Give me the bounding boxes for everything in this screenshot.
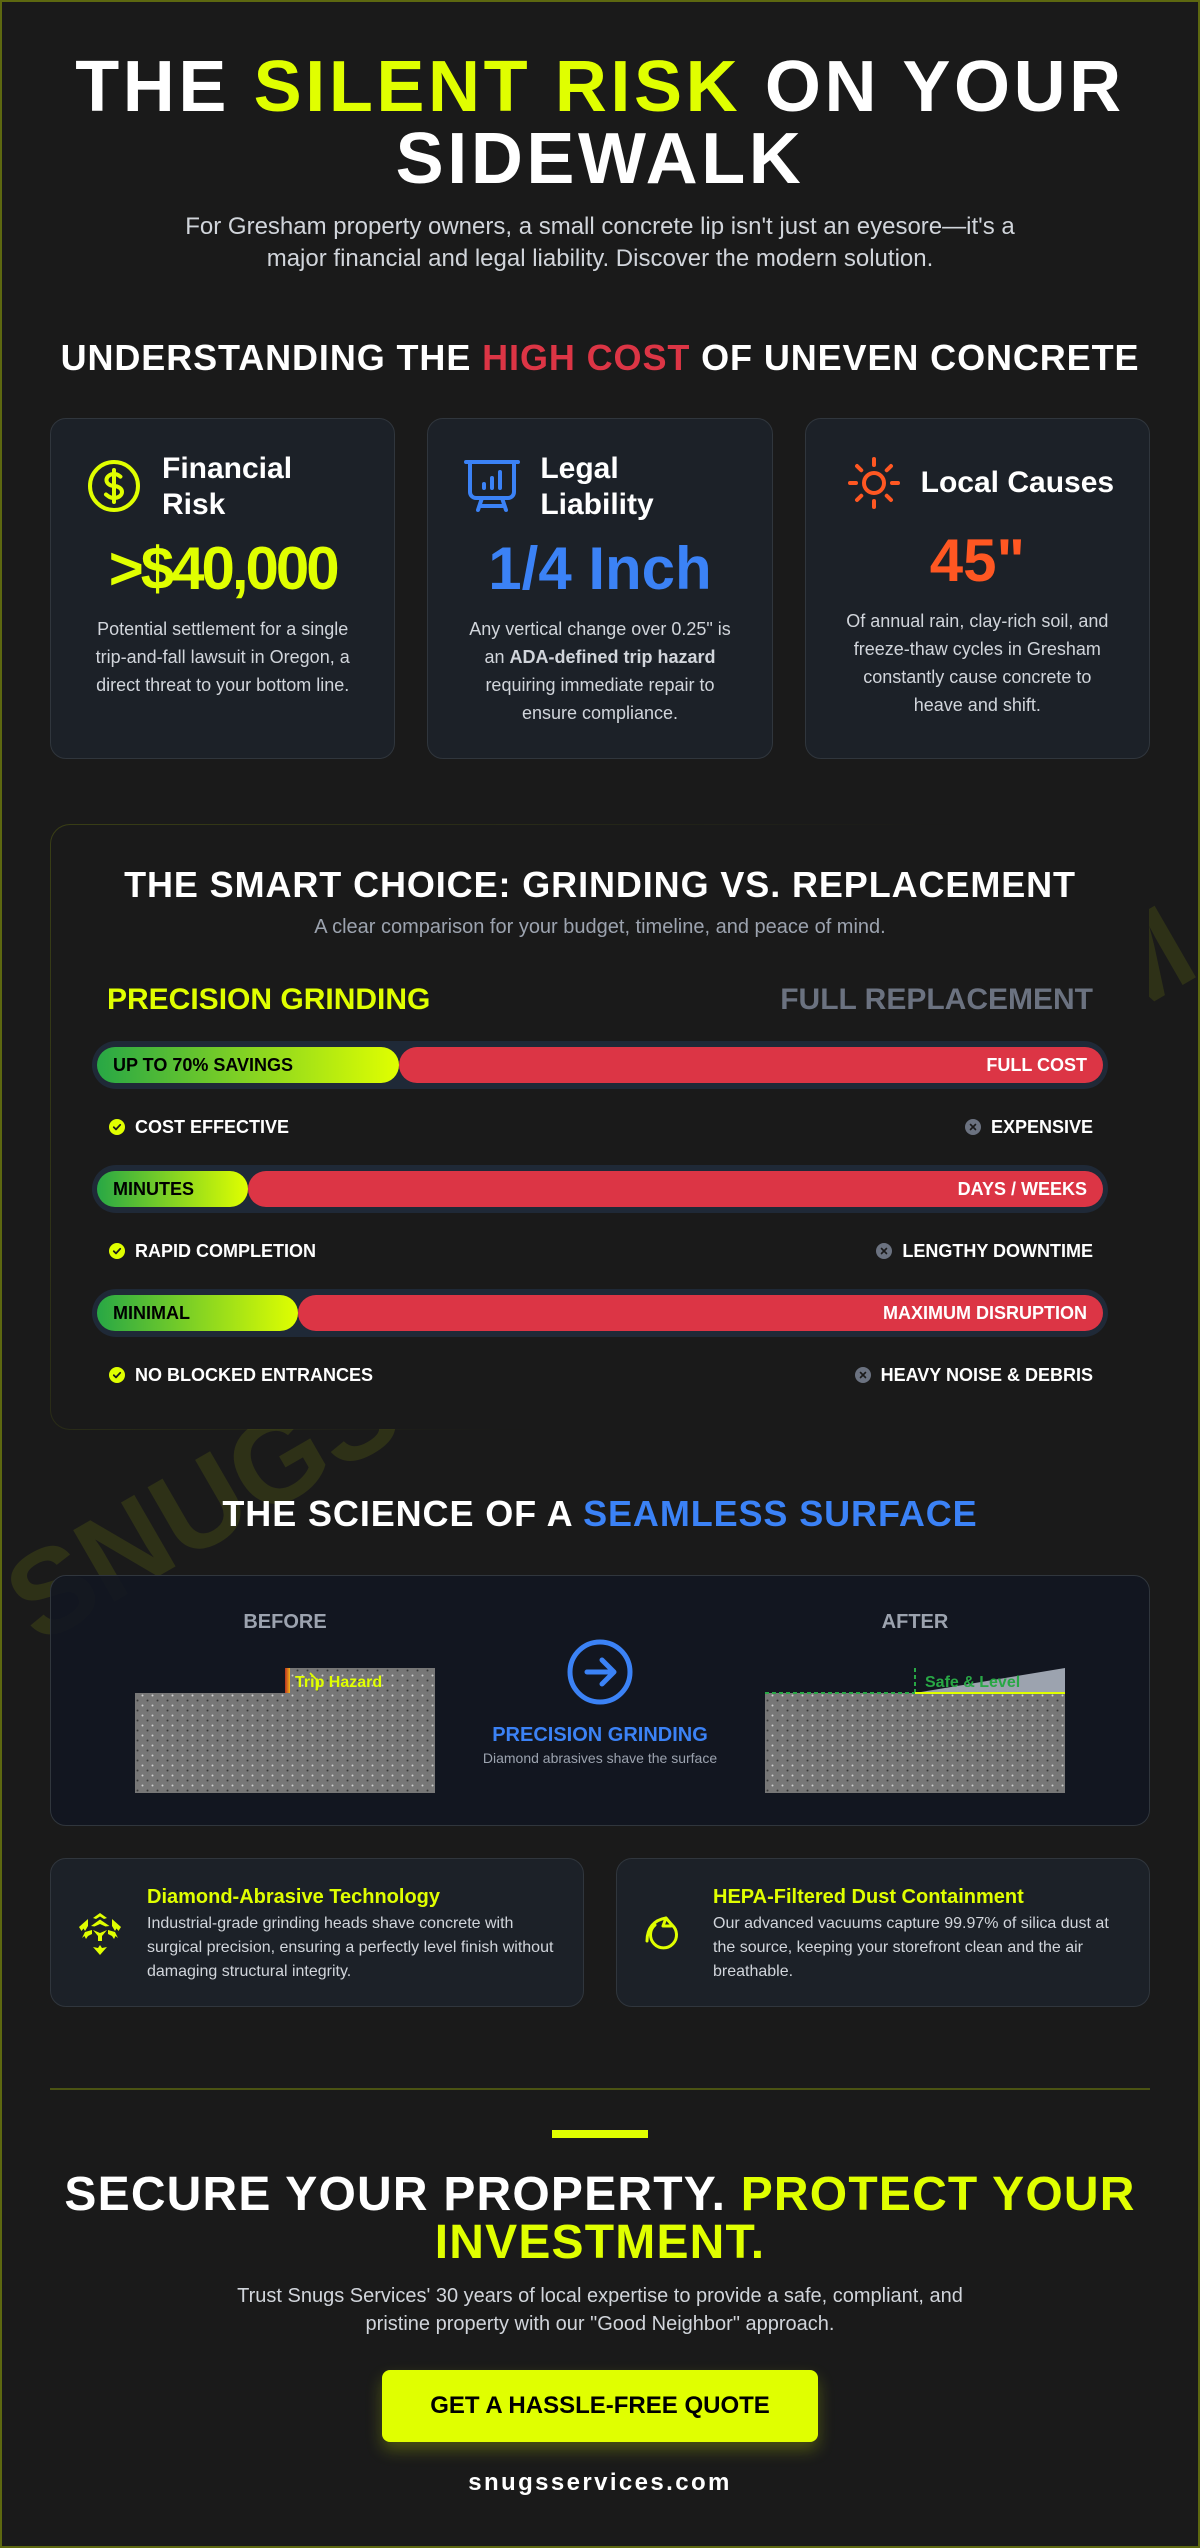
description: freeze-thaw cycles in Gresham: [854, 639, 1101, 659]
accent bar: [552, 2130, 648, 2138]
card title: [162, 452, 292, 521]
icon: dollar: [88, 460, 140, 512]
heading: THE SMART CHOICE: GRINDING VS. REPLACEMENT: [124, 864, 1076, 905]
comparison bar: cost: FULL COST: [986, 1055, 1087, 1075]
subtitle: [185, 213, 1015, 272]
comparison bar: cost: [92, 1041, 1108, 1089]
label: expensive: EXPENSIVE: [991, 1117, 1093, 1137]
cta button: [382, 2370, 818, 2442]
feature text: breathable.: [713, 1963, 793, 1980]
label: after: AFTER: [882, 1611, 949, 1633]
process title: PRECISION GRINDING: [492, 1724, 708, 1746]
comparison bar: disruption: [92, 1289, 1108, 1337]
cta heading: INVESTMENT.: [435, 2216, 765, 2269]
cta text: Trust Snugs Services' 30 years of local expertise to provide a safe, compliant, and: [237, 2285, 963, 2307]
level lines: [765, 1668, 915, 1693]
panel: before and after diagram: [50, 1575, 1150, 1826]
column label: replacement: FULL REPLACEMENT: [780, 983, 1093, 1016]
panel: financial risk: [50, 418, 395, 759]
description: Potential settlement for a single: [97, 619, 348, 639]
panel: local causes: [805, 418, 1150, 759]
subtitle: For Gresham property owners, a small concrete lip isn't just an eyesore—it's a: [185, 213, 1015, 240]
card title: Local Causes: [921, 466, 1114, 499]
card title: Financial: [162, 452, 292, 485]
title: THE SILENT RISK ON YOUR: [75, 47, 1125, 127]
description: Any vertical change over 0.25" is: [469, 619, 731, 639]
feature title: HEPA-Filtered Dust Containment: [713, 1886, 1024, 1908]
description: Of annual rain, clay-rich soil, and: [846, 611, 1108, 631]
subtitle: major financial and legal liability. Discover the modern solution.: [267, 245, 933, 272]
comparison bar: time: MINUTES: [113, 1179, 194, 1199]
description: [96, 619, 350, 695]
process note: Diamond abrasives shave the surface: [483, 1750, 717, 1766]
cta heading: [64, 2168, 1136, 2269]
comparison bar: time: [92, 1165, 1108, 1213]
feature text: surgical precision, ensuring a perfectly level finish without: [147, 1939, 553, 1956]
website: snugsservices.com: [468, 2469, 732, 2496]
comparison bar: cost: UP TO 70% SAVINGS: [113, 1055, 293, 1075]
ground away wedge: [915, 1668, 1065, 1693]
panel: legal liability: [427, 418, 773, 759]
comparison bar: time: DAYS / WEEKS: [958, 1179, 1087, 1199]
feature text: [147, 1915, 554, 1980]
panel: diamond abrasive: [50, 1858, 584, 2007]
process step: [483, 1642, 717, 1766]
feature text: [713, 1915, 1109, 1980]
hazard edge: [285, 1668, 290, 1693]
concrete with raised slab: [135, 1668, 435, 1793]
panel: hepa dust: [616, 1858, 1150, 2007]
feature text: Our advanced vacuums capture 99.97% of silica dust at: [713, 1915, 1109, 1932]
comparison bar: disruption: MINIMAL: [113, 1303, 190, 1323]
heading: seamless surface: THE SCIENCE OF A SEAMLESS SURFACE: [222, 1493, 978, 1534]
after diagram: [765, 1611, 1065, 1793]
hazard label: Trip Hazard: [295, 1674, 382, 1691]
label: rapid completion: RAPID COMPLETION: [135, 1241, 316, 1261]
cta button: GET A HASSLE-FREE QUOTE: [430, 2392, 770, 2419]
title: [75, 47, 1125, 199]
card title: Liability: [540, 488, 654, 521]
label: cost effective: COST EFFECTIVE: [135, 1117, 289, 1137]
column label: grinding: PRECISION GRINDING: [107, 983, 430, 1016]
panel: grinding vs replacement: [50, 824, 1150, 1430]
subheading: A clear comparison for your budget, timeline, and peace of mind.: [314, 916, 886, 938]
description: requiring immediate repair to: [485, 675, 715, 695]
icon: sun: [848, 457, 900, 509]
label: before: BEFORE: [243, 1611, 327, 1633]
stat: >$40,000: [109, 535, 337, 602]
icon: presentation chart: [464, 460, 520, 512]
cta text: pristine property with our "Good Neighbor" approach.: [366, 2313, 834, 2335]
feature text: damaging structural integrity.: [147, 1963, 351, 1980]
concrete level: [765, 1693, 1065, 1793]
card title: Legal: [540, 452, 619, 485]
label: heavy noise: HEAVY NOISE & DEBRIS: [881, 1365, 1093, 1385]
icon: diamond head: [79, 1913, 121, 1955]
watermark: SNUGSSERVICES.COM: [0, 880, 1200, 1668]
description: direct threat to your bottom line.: [96, 675, 349, 695]
before diagram: [135, 1611, 435, 1793]
stat: 1/4 Inch: [488, 535, 712, 602]
description: trip-and-fall lawsuit in Oregon, a: [96, 647, 350, 667]
feature text: the source, keeping your storefront clean and the air: [713, 1939, 1083, 1956]
label: no blocked entrances: NO BLOCKED ENTRANCES: [135, 1365, 373, 1385]
comparison bar: disruption: MAXIMUM DISRUPTION: [883, 1303, 1087, 1323]
description: heave and shift.: [914, 695, 1041, 715]
card title: [540, 452, 654, 521]
feature title: Diamond-Abrasive Technology: [147, 1886, 440, 1908]
level label: Safe & Level: [925, 1674, 1020, 1691]
description: [846, 611, 1108, 715]
description: [469, 619, 731, 723]
title: SIDEWALK: [396, 119, 804, 199]
icon: arrow circle: [570, 1642, 630, 1702]
description: ensure compliance.: [522, 703, 678, 723]
cta heading: SECURE YOUR PROPERTY. PROTECT YOUR: [64, 2168, 1136, 2221]
label: lengthy downtime: LENGTHY DOWNTIME: [902, 1241, 1093, 1261]
heading: high cost: UNDERSTANDING THE HIGH COST OF UNEVEN CONCRETE: [61, 337, 1139, 378]
icon: dust containment: [646, 1916, 678, 1950]
card title: Risk: [162, 488, 225, 521]
description: constantly cause concrete to: [863, 667, 1091, 687]
description: an ADA-defined trip hazard: [484, 647, 716, 667]
feature text: Industrial-grade grinding heads shave concrete with: [147, 1915, 513, 1932]
cta text: [237, 2285, 963, 2335]
stat: 45": [930, 527, 1025, 594]
